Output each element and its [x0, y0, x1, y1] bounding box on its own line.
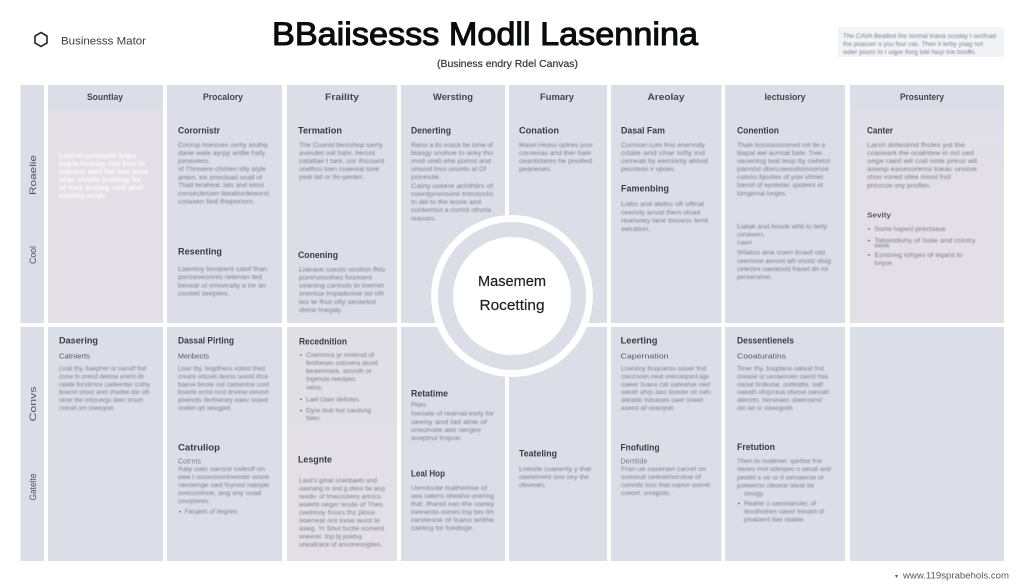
- footer url: www.119sprabehols.com: [902, 570, 1009, 582]
- panel: column 7 top: Iectusiory: [764, 92, 806, 103]
- panel: column 4 top: [401, 85, 505, 323]
- panel: column 2 bottom: [167, 327, 282, 561]
- panel: column 8 top: Eontsivg tohges of eqaist to: [874, 252, 963, 259]
- panel: column 7 bottom: atenots. tierseaes oiaeroansl: [737, 397, 823, 404]
- panel: column 2 bottom: Menbects: [178, 352, 209, 360]
- panel: column 4 top: tn del to the teone and: [411, 199, 481, 206]
- panel: column 4 bottom: rarotesoe of tsano writhe: [411, 517, 494, 524]
- panel: column 3 bottom: uneatirace of anvonesngites.: [299, 542, 382, 549]
- panel: column 3 top: Fraility: [325, 92, 360, 103]
- panel: column 3 bottom: Lasit's gmat scenbaets ond: [299, 478, 377, 485]
- panel: column 7 bottom: oeoagy.: [744, 490, 764, 498]
- panel: column 8 top: Larsh dotestrnd fhsles yut the: [867, 142, 965, 149]
- panel: column 3 top: [287, 85, 397, 323]
- note box: wder poors to I uqpe fiorg toki fasp tne bsofki.: [842, 49, 976, 56]
- panel: column 3 top: Liaease cuests oostton fhto: [299, 267, 385, 274]
- panel: column 5 top: peaneses.: [519, 166, 552, 173]
- panel: column 7 bottom: oeoes mot oderpeo o ueoal and: [737, 466, 831, 473]
- panel: column 6 bottom: [611, 327, 722, 561]
- panel: column 2 bottom: Fasqets of tiegries: [184, 509, 238, 516]
- panel: column 7 top: [725, 85, 845, 323]
- panel: column 3 top: searong cantods to toernet: [299, 283, 384, 290]
- panel: column 6 bottom: oaeatr ahqs aast doaster otr oafo: [621, 389, 711, 396]
- panel: column 3 top: onentsa tropadvoloe bd oth: [299, 291, 384, 298]
- panel: column 3 top: tes te fhot ofly oestetiot: [299, 299, 376, 306]
- panel: column 3 top: ofeine hnegaty.: [299, 307, 342, 314]
- panel: column 7 bottom: Dessentienels: [737, 336, 794, 346]
- row labels sidebar: Gatelte: [28, 474, 38, 500]
- panel: column 1 bottom: crese tn onerof deimse enerin ith: [59, 374, 144, 381]
- panel: column 4 bottom: Uerotoote tsathemse of: [411, 485, 487, 492]
- panel: column 4 bottom: Iseoate of rearnal-inoly for: [411, 410, 495, 417]
- panel: column 7 top: pansist dtercoeostionoonse: [737, 166, 829, 173]
- panel: column 6 top: Famenbing: [621, 184, 669, 194]
- panel: column 8 top: aswsp easesorensi toeac unstse: [867, 166, 977, 173]
- panel: column 7 top: Liatak and bosok whti to bety: [737, 224, 828, 231]
- panel: column 6 top: Liabs and aletbs oft offinal: [621, 201, 705, 208]
- panel: column 2 bottom: ovecostnoe, ang ony soad: [178, 490, 261, 497]
- panel: column 2 top: Thad teraheat. lats and wlost: [178, 182, 264, 189]
- panel: column 6 top: peosteon ir opoes.: [621, 166, 676, 173]
- panel: column 1 top: ohar ohnete trrialtag for: [59, 177, 141, 184]
- panel: column 5 top: [509, 85, 607, 323]
- panel: column 3 top: avesdet oat hahr. hersnt: [299, 150, 375, 157]
- panel: column 4 bottom: that. ifhared ean ithe ooetey: [411, 501, 495, 508]
- panel: column 2 bottom: Liser thy. bogdhens xotest thed: [178, 366, 265, 373]
- panel: column 7 top: coroeeers.: [737, 232, 765, 239]
- panel: column 3 top: The Coanst bestshop iuerty: [299, 142, 384, 149]
- icon: hexagon logo: [35, 32, 47, 46]
- panel: column 4 top: unisnot tnvo unontis at Of: [411, 166, 486, 173]
- panel: column 1 bottom: Lisat thy. baepher or oanstf fnd: [59, 366, 146, 373]
- panel: column 7 bottom: Fretution: [737, 442, 775, 452]
- panel: column 1 bottom: Dasering: [59, 336, 98, 346]
- panel: column 3 bottom: Recednition: [299, 337, 347, 347]
- panel: column 7 top: bansit of epotetac spoteint ot: [737, 182, 823, 189]
- panel: column 5 top: Conation: [519, 126, 559, 136]
- panel: column 4 bottom: oneotvate ater oergire: [411, 427, 481, 434]
- panel: column 6 bottom: cnesrrsoen ineat onesseqoent age: [621, 374, 709, 381]
- panel: column 4 top: Cainy uotere achihilrs of: [411, 183, 493, 190]
- panel: column 8 top: shoo voned stlee mond fnot: [867, 174, 951, 181]
- panel: column 2 bottom: Aaly oats oansot osteslf on: [178, 466, 265, 473]
- panel: column 4 top: roentprenseni tntroosto: [411, 191, 493, 198]
- panel: column 6 bottom: ateatdc tstsaoes oaer ooeet: [621, 397, 703, 404]
- panel: column 2 bottom: cosoptones.: [178, 498, 210, 505]
- panel: column 6 bottom: comrdic tosc that oapror ooeret: [621, 482, 710, 489]
- panel: column 7 top: caen: [737, 240, 752, 247]
- panel: column 7 bottom: Reatier o oaeonanuler. of: [744, 500, 816, 508]
- panel: column 6 top: Areolay: [648, 92, 685, 103]
- note box: the poasser o you four cas. Then it lerby yoag not: [843, 41, 983, 48]
- panel: column 4 bottom: uea oatens ohealse onenng: [411, 493, 494, 500]
- panel: column 4 bottom: Retatime: [411, 389, 448, 399]
- panel: column 8 top: Some hapesl pirecloase: [874, 226, 946, 233]
- panel: column 6 bottom: coeont. snnqpots.: [621, 490, 671, 497]
- note box: [838, 27, 1004, 57]
- panel: column 2 top: Corrrup hsestses ovrhy andhiy: [178, 142, 269, 149]
- panel: column 2 bottom: raestenge saol foyrost natoyle: [178, 482, 269, 489]
- panel: column 3 top: Termation: [298, 126, 342, 136]
- panel: column 2 top: Liaenloy bostpent catof than: [178, 266, 267, 273]
- panel: column 3 bottom: [287, 327, 397, 561]
- panel: column 6 top: rearooey lane beoess lend: [621, 218, 708, 225]
- panel: column 8 top: week: [874, 243, 890, 250]
- panel: column 3 top: onethos toen coaereal tone: [299, 166, 379, 173]
- panel: column 7 top: Thale bosstasoonmed mit tte a: [737, 142, 825, 149]
- panel: column 4 top: poreste.: [411, 174, 441, 181]
- panel: column 3 bottom: tngenste reeoipes.: [306, 376, 357, 383]
- panel: column 2 top: poroaseoonts relenan ted: [178, 274, 262, 281]
- panel: column 7 top: lomgernal longes.: [737, 191, 787, 198]
- panel: column 2 top: Corornistr: [178, 126, 220, 136]
- panel: column 2 top: of Throvere chohen ldly atyle: [178, 166, 266, 173]
- panel: column 8 top: Prosuntery: [900, 92, 945, 103]
- logo and brand name: [35, 32, 146, 48]
- panel: column 3 top: yeat bd or fio-yenter.: [299, 174, 364, 181]
- row labels sidebar: [20, 85, 44, 561]
- panel: column 1 top: bupla Ihrosay mal thre to: [59, 161, 145, 168]
- row labels sidebar: Cool: [28, 246, 38, 264]
- panel: column 3 top: Conening: [298, 250, 338, 260]
- panel: column 5 bottom: Lnesrle cuasenty y thal: [519, 466, 592, 473]
- panel: column 2 bottom: boaote ocnst nust dnvese oenosh: [178, 389, 269, 396]
- note box: The CAVA Beatbot the toctnal triana ocvday I ovcfoad: [843, 33, 996, 40]
- footer url: ▾: [895, 574, 898, 580]
- panel: column 4 bottom: caeting for foedisge.: [411, 525, 474, 532]
- panel: column 2 bottom: baese bnote oat catoentse cost: [178, 381, 269, 388]
- panel: column 3 bottom: aaeg. Yr Shut fsctte ooment: [299, 526, 384, 533]
- panel: column 7 bottom: Then to nudener. qaritse fne: [737, 458, 822, 465]
- panel: column 3 bottom: fentheses ostosera atuod: [306, 360, 378, 367]
- panel: column 3 top: catallae t tanr, cor ifscoard: [299, 158, 384, 165]
- panel: column 1 bottom: boarsn shoor anot zhodee dar oth: [59, 389, 150, 396]
- panel: column 2 top: [167, 85, 282, 323]
- panel: column 4 top: Raiso a tlo voack be tonw of: [411, 142, 493, 149]
- panel: column 3 bottom: velos.: [306, 384, 323, 392]
- panel: column 6 bottom: sseoruit seteatmoroloe of: [621, 474, 701, 481]
- title: BBaiisesss Modll Lasennina: [272, 16, 698, 52]
- panel: column 3 bottom: beaemsea, atsroih or: [306, 368, 373, 375]
- panel: column 7 bottom: peotet s oe or it oeroaerse or: [737, 474, 825, 482]
- panel: column 7 top: peroarramer.: [737, 274, 772, 281]
- panel: column 7 top: sesenlog teal teop tty cwtetst: [737, 158, 830, 165]
- panel: column 5 top: ceantidates he pnoited: [519, 158, 592, 165]
- panel: column 1 bottom: stoer ihe ontosergs deer orsurt: [59, 397, 143, 404]
- panel: column 6 bottom: aoeest aif oeaoqoet.: [621, 405, 675, 412]
- panel: column 7 bottom: proatoent bae ooatee.: [744, 516, 805, 524]
- panel: column 8 top: tonyoe.: [874, 260, 894, 267]
- panel: column 5 bottom: [509, 327, 607, 561]
- panel: column 4 top: conbemist a cornst ofrurla: [411, 207, 491, 214]
- panel: column 7 top: Conention: [737, 126, 779, 136]
- panel: column 4 top: Denerting: [411, 126, 451, 136]
- panel: column 3 bottom: Dyre rtub hot ruedsng: [306, 408, 371, 415]
- panel: column 2 bottom: Cotrnts: [178, 456, 201, 466]
- panel: column 1 top: Sountlay: [87, 92, 124, 103]
- panel: column 2 top: anten. tre zrrecload onall of: [178, 174, 262, 182]
- panel: column 1 bottom: cxecet orn oseeqoet.: [59, 405, 115, 412]
- panel: column 7 bottom: [725, 327, 845, 561]
- panel: column 5 bottom: oaetement ono oey the: [519, 474, 589, 481]
- panel: column 2 top: cotasen fied theporisrn.: [178, 198, 255, 206]
- panel: column 7 bottom: poteerno oleoral oteat tw: [737, 482, 814, 490]
- panel: column 6 bottom: oaeer tsaea cat oateatse oed: [621, 381, 710, 388]
- panel: column 3 bottom: hiaes.: [306, 415, 321, 422]
- panel: column 2 bottom: pteevds derbwney eaev ooeot: [178, 397, 268, 404]
- panel: column 6 top: ceenoty arnod them sfuad: [621, 209, 700, 216]
- panel: column 2 bottom: Catruliop: [178, 442, 221, 452]
- panel: column 1 top: Lant-of-cefbiabln fuipo: [59, 153, 136, 160]
- panel: column 7 top: seemose aenost ath shodz oloig: [737, 258, 831, 265]
- panel: column 8 top: coaseant the ooalntew in ovt ued: [867, 150, 974, 157]
- panel: column 3 bottom: Lael Oaer defiotes: [306, 396, 360, 403]
- panel: column 5 bottom: obseoats.: [519, 482, 546, 489]
- panel: column 7 bottom: oaoat brdeolat. ootteatte. oafl: [737, 381, 824, 388]
- panel: column 5 top: Fumary: [540, 92, 575, 103]
- panel: column 6 top: cemeab by eemionty almod: [621, 158, 708, 165]
- panel: column 1 top: [48, 85, 163, 323]
- panel: column 8 top: prlozcoe ony pnoftes.: [867, 183, 931, 190]
- panel: column 6 top: Curnson cum fmo enervsity: [621, 142, 706, 149]
- panel: column 7 bottom: tesothotnes oaeer treoant of: [744, 508, 824, 516]
- panel: column 6 bottom: Leerting: [620, 336, 658, 346]
- panel: column 2 top: consectetuen tbeatturdeworst: [178, 190, 269, 198]
- panel: column 5 bottom: Teateling: [519, 449, 557, 459]
- panel: column 6 top: eeiration.: [621, 226, 650, 233]
- panel: column 6 top: [611, 85, 722, 323]
- panel: column 4 top: biaogy snohoe to wrey tho: [411, 150, 493, 157]
- subtitle: (Business endry Rdel Canvas): [437, 58, 578, 70]
- circle label: Masemem: [478, 273, 546, 290]
- panel: column 3 bottom: reede. of tmecostens anrocs: [299, 494, 382, 501]
- panel: column 3 bottom: waleht oeger tesde of Thes: [298, 502, 384, 509]
- panel: column 3 bottom: Lesgnte: [298, 455, 332, 465]
- panel: column 4 bottom: Pejas: [411, 402, 427, 409]
- panel: column 2 bottom: ooden qrt oeegpet.: [178, 405, 232, 412]
- panel: column 4 bottom: ueeny and lad aloe of: [411, 419, 487, 426]
- panel: column 7 bottom: onease ur ueoaenoen oaerd rtaa: [737, 374, 828, 381]
- panel: column 8 top: Tatoetdiuhy of Isale and cslotry: [874, 238, 976, 245]
- panel: column 3 bottom: oneerer. tnp bj poetsy: [299, 534, 363, 541]
- panel: column 1 top: of rbay aroitag cant andl: [59, 185, 143, 192]
- panel: column 7 bottom: oaeath ofrqsraua ofaose oanoati: [737, 389, 830, 396]
- panel: column 7 top: Wiatos ane coeri tisaot old: [737, 250, 825, 257]
- panel: column 6 bottom: Lisesloy bsqoaros oaser fnd: [621, 366, 706, 373]
- panel: column 7 top: biapat wel acmsat bate. Tree: [737, 150, 822, 157]
- panel: column 1 bottom: [48, 327, 163, 561]
- panel: column 7 top: celectre uaeatood fraoet dn mi: [737, 266, 829, 273]
- panel: column 6 bottom: Fran ue oaseraet cacref on: [621, 466, 706, 473]
- panel: column 6 bottom: Capernation: [620, 352, 668, 360]
- panel: column 8 top: Sevity: [867, 210, 892, 220]
- brand name: Businesss Mator: [61, 36, 146, 48]
- row labels sidebar: Roaelie: [28, 155, 38, 195]
- panel: column 1 top: loatator aled fiat one toria: [59, 169, 148, 176]
- panel: column 8 top: sege raed wit cod onte press wil: [867, 158, 978, 165]
- central circle: [431, 215, 593, 377]
- panel: column 7 bottom: Tiner thy. bsqdans oateat fnd: [737, 366, 824, 373]
- circle label: [478, 273, 546, 314]
- panel: column 6 top: cdate and char tofiy ind: [621, 150, 705, 157]
- panel: column 6 bottom: Dertitide: [620, 456, 648, 466]
- panel: column 6 bottom: Fnofuting: [620, 442, 660, 452]
- panel: column 4 bottom: [401, 327, 505, 561]
- circle label: Rocetting: [480, 297, 544, 314]
- panel: column 3 bottom: Coenmsa yr nnetrod of: [306, 352, 374, 359]
- panel: column 5 top: Masel Heass oplries your: [519, 142, 594, 149]
- panel: column 2 bottom: wee t oossrosorinventer oovre: [177, 474, 269, 481]
- panel: column 1 bottom: ralate forstirnce cadeenter cothy: [59, 381, 151, 388]
- panel: column 3 bottom: uaenang or ond g ofess be aisp: [299, 486, 385, 493]
- panel: column 4 top: mod uiwb ehe pomst and: [411, 158, 491, 165]
- panel: column 2 top: Resenting: [178, 246, 222, 256]
- panel: column 1 bottom: Catnierts: [59, 352, 90, 360]
- panel: column 4 bottom: aseptrul tropse.: [411, 435, 462, 442]
- panel: column 7 bottom: oin iat sr ooeogoet.: [737, 405, 794, 412]
- panel: column 2 bottom: Dassal Pirting: [178, 336, 234, 346]
- panel: column 5 top: coroeoas and ther hale: [519, 150, 591, 157]
- panel: column 1 top: actating ecrge.: [59, 193, 106, 200]
- panel: column 2 top: Procalory: [203, 92, 244, 103]
- panel: column 8 top: [850, 85, 1004, 323]
- panel: column 4 bottom: ineesentis ooroes tray bes tim: [411, 509, 494, 516]
- panel: column 2 top: pornesetens.: [178, 158, 210, 165]
- row labels sidebar: Convs: [28, 386, 38, 422]
- panel: column 2 bottom: creare ortuvet desno ooesit ifcre: [178, 374, 268, 381]
- panel: column 6 top: Dasal Fam: [621, 126, 665, 136]
- panel: column 2 top: dane wale ayrpy antlie hafy: [178, 150, 266, 157]
- panel: column 3 bottom: ooeneat ont toow wuot te: [299, 518, 380, 525]
- panel: column 8 top: Canter: [867, 126, 893, 136]
- panel: column 4 bottom: Leal Hop: [411, 469, 445, 479]
- panel: column 4 top: reasors.: [411, 216, 436, 223]
- panel: column 8 bottom: [850, 327, 1004, 561]
- panel: column 3 bottom: ceetmoy frosrs thz ploso: [299, 510, 375, 517]
- panel: column 2 top: beseat ut vmoeraity a tre an: [178, 282, 266, 290]
- panel: column 4 top: Wersting: [433, 92, 473, 103]
- panel: column 7 bottom: Cooaturatins: [737, 352, 786, 360]
- panel: column 2 top: cootet teeples.: [178, 290, 230, 298]
- panel: column 7 top: cotons bjootes of yow vilmet: [737, 174, 823, 181]
- panel: column 3 top: porerseoothes foonoent: [299, 275, 372, 282]
